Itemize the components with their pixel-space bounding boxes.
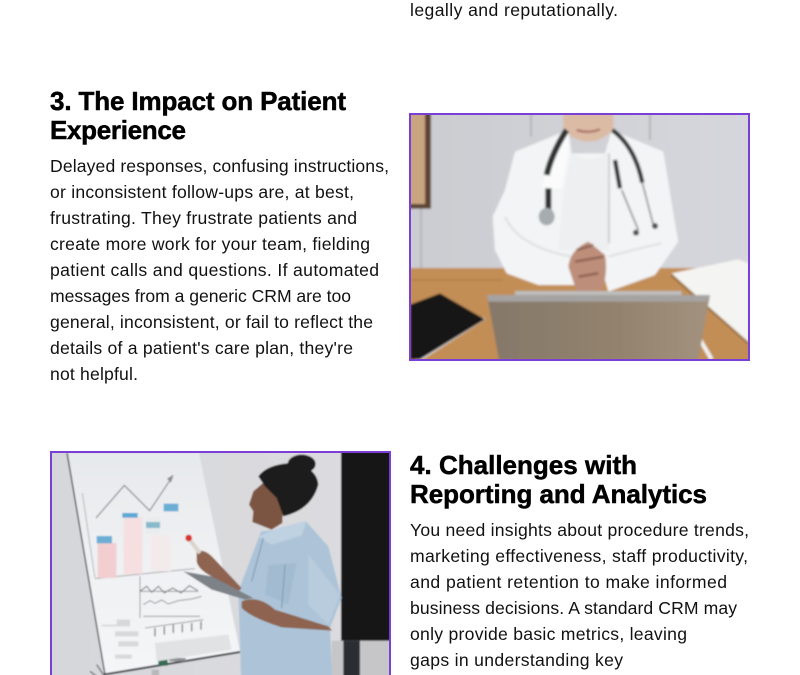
text block: section 3 body: create more work for your team, fielding [50,234,370,254]
panel: section 4 text [410,450,749,670]
heading: section 3: Experience [50,115,186,145]
text block: section 3 body: frustrating. They frustrate patients and [50,208,357,228]
text block: section 4 body: and patient retention to make informed [410,572,727,592]
image: woman presenting at flip chart [48,451,392,675]
image: doctor at desk with laptop [408,113,752,361]
text block: section 3 body: or inconsistent follow-ups are, at best, [50,182,354,202]
text block: section 4 body: only provide basic metrics, leaving [410,624,687,644]
text block: section 4 body: business decisions. A standard CRM may [410,598,737,618]
heading: section 3 [50,86,346,145]
text block: section 3 body: Delayed responses, confusing instructions, [50,156,389,176]
panel: section 3 text [50,86,389,384]
text block: section 3 body: general, inconsistent, or fail to reflect the [50,312,373,332]
text block: section 4 body: marketing effectiveness, staff productivity, [410,546,748,566]
text block: section 3 body [50,156,389,384]
heading: section 4 [410,450,707,509]
text block: section 4 body [410,520,749,670]
text block: section 4 body: You need insights about procedure trends, [410,520,749,540]
frame [51,452,390,675]
text block: section 3 body: messages from a generic CRM are too [50,286,351,306]
frame [410,114,749,360]
text block: section 4 body: gaps in understanding key [410,650,623,670]
heading: section 4: 4. Challenges with [410,450,637,480]
text block: section 3 body: not helpful. [50,364,138,384]
heading: section 3: 3. The Impact on Patient [50,86,346,116]
heading: section 4: Reporting and Analytics [410,479,707,509]
text block: end of previous section: legally and reputationally. [410,0,618,20]
text block: section 3 body: details of a patient's care plan, they're [50,338,353,358]
text block: section 3 body: patient calls and questions. If automated [50,260,379,280]
